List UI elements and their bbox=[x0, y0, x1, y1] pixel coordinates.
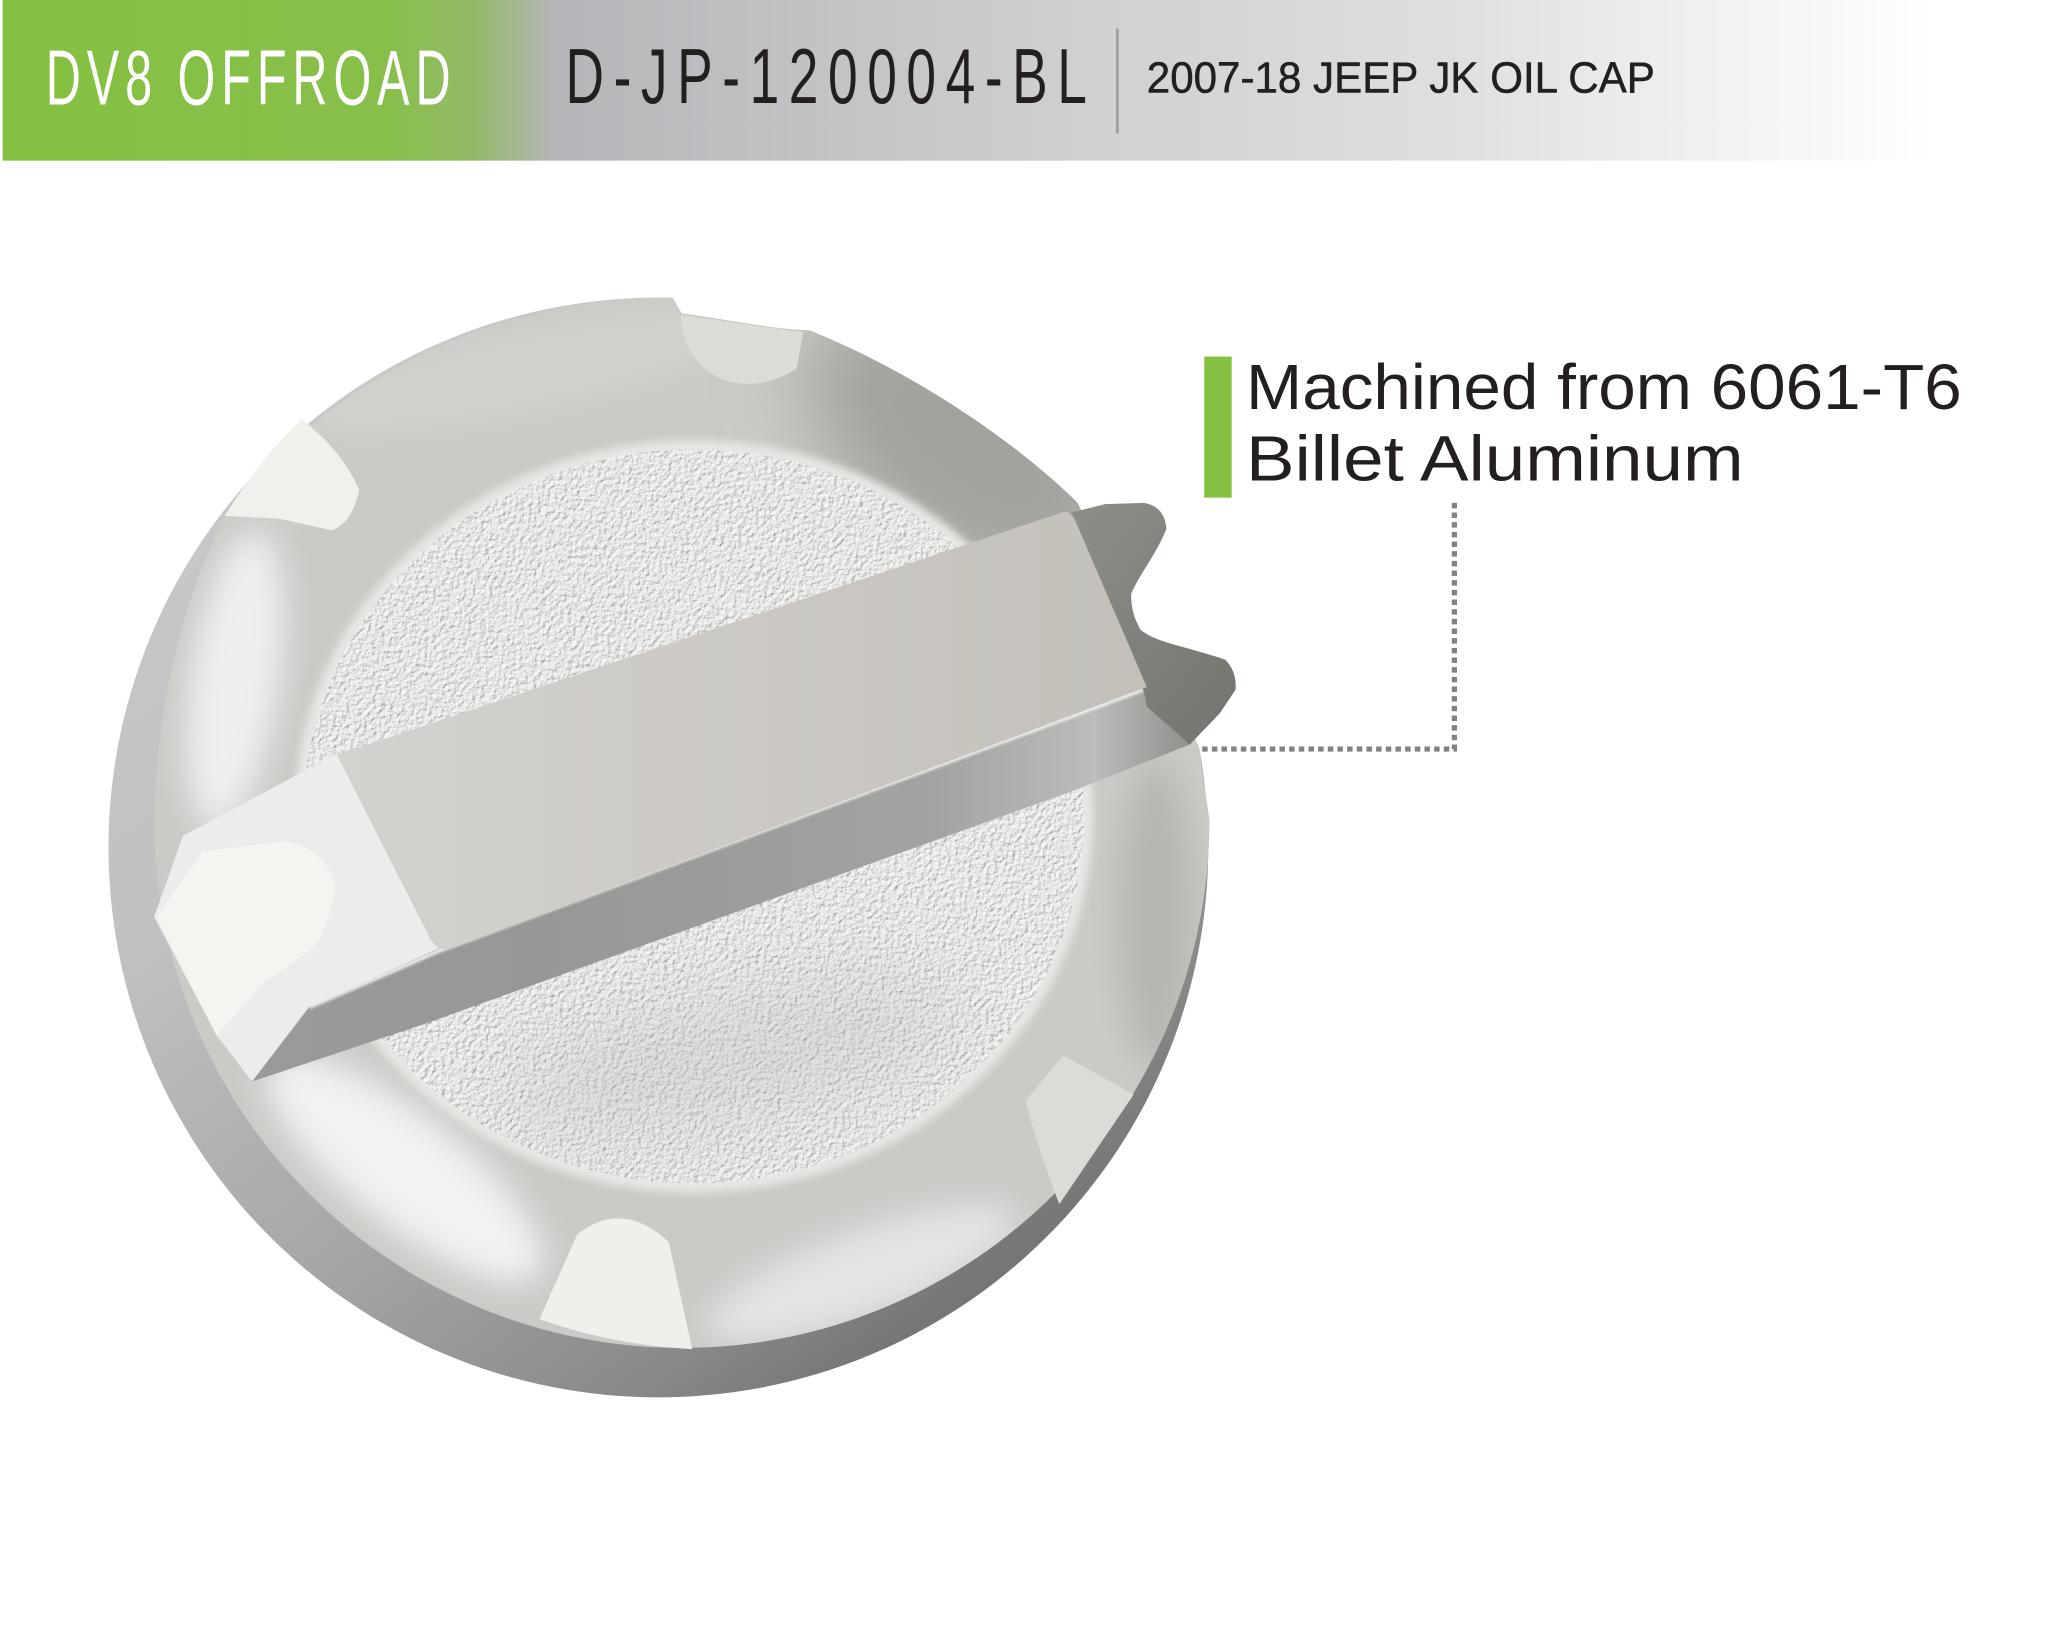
notch: upper left bbox=[225, 419, 359, 530]
header divider bbox=[1116, 29, 1119, 133]
product name: 2007-18 JEEP JK OIL CAP bbox=[1147, 55, 1655, 103]
brand name: DV8 OFFROAD bbox=[46, 34, 451, 121]
cap top ring bbox=[154, 298, 1210, 1348]
part number: D-JP-120004-BL bbox=[566, 33, 1087, 121]
notch: lower right bbox=[1025, 1055, 1134, 1204]
bar shadow side face bbox=[252, 687, 1232, 1081]
callout text bbox=[1246, 351, 1962, 495]
bar top face bbox=[337, 512, 1147, 949]
bar end lobes bbox=[1063, 503, 1236, 744]
notch: top bbox=[680, 315, 803, 384]
notch: left bbox=[157, 841, 336, 1036]
textured recessed disc bbox=[294, 440, 1093, 1192]
cap body side wall bbox=[109, 298, 1208, 1397]
callout text: Machined from 6061-T6 bbox=[1246, 351, 1962, 423]
bright left end of bar bbox=[154, 754, 439, 1081]
notch: bottom bbox=[539, 1218, 692, 1349]
dotted leader line bbox=[1199, 503, 1454, 749]
bar highlight edge bbox=[310, 690, 1143, 1007]
callout accent bar bbox=[1204, 357, 1232, 498]
callout: machined from billet aluminum bbox=[1199, 351, 1962, 749]
header banner bbox=[3, 0, 1933, 161]
callout text: Billet Aluminum bbox=[1246, 423, 1744, 495]
product photo: billet aluminum oil cap bbox=[104, 244, 1254, 1411]
